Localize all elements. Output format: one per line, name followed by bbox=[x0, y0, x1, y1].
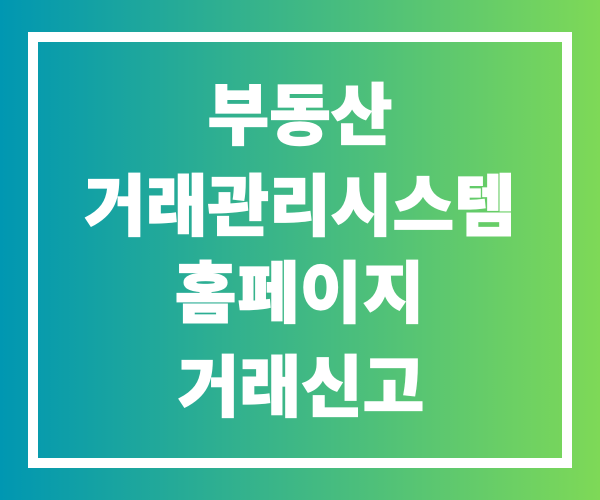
title line 2: 거래관리시스템 bbox=[84, 153, 516, 250]
title line 4: 거래신고 bbox=[178, 334, 424, 431]
title line 1: 부동산 bbox=[208, 62, 392, 159]
title line 3: 홈페이지 bbox=[175, 240, 425, 337]
white frame bbox=[28, 32, 572, 468]
